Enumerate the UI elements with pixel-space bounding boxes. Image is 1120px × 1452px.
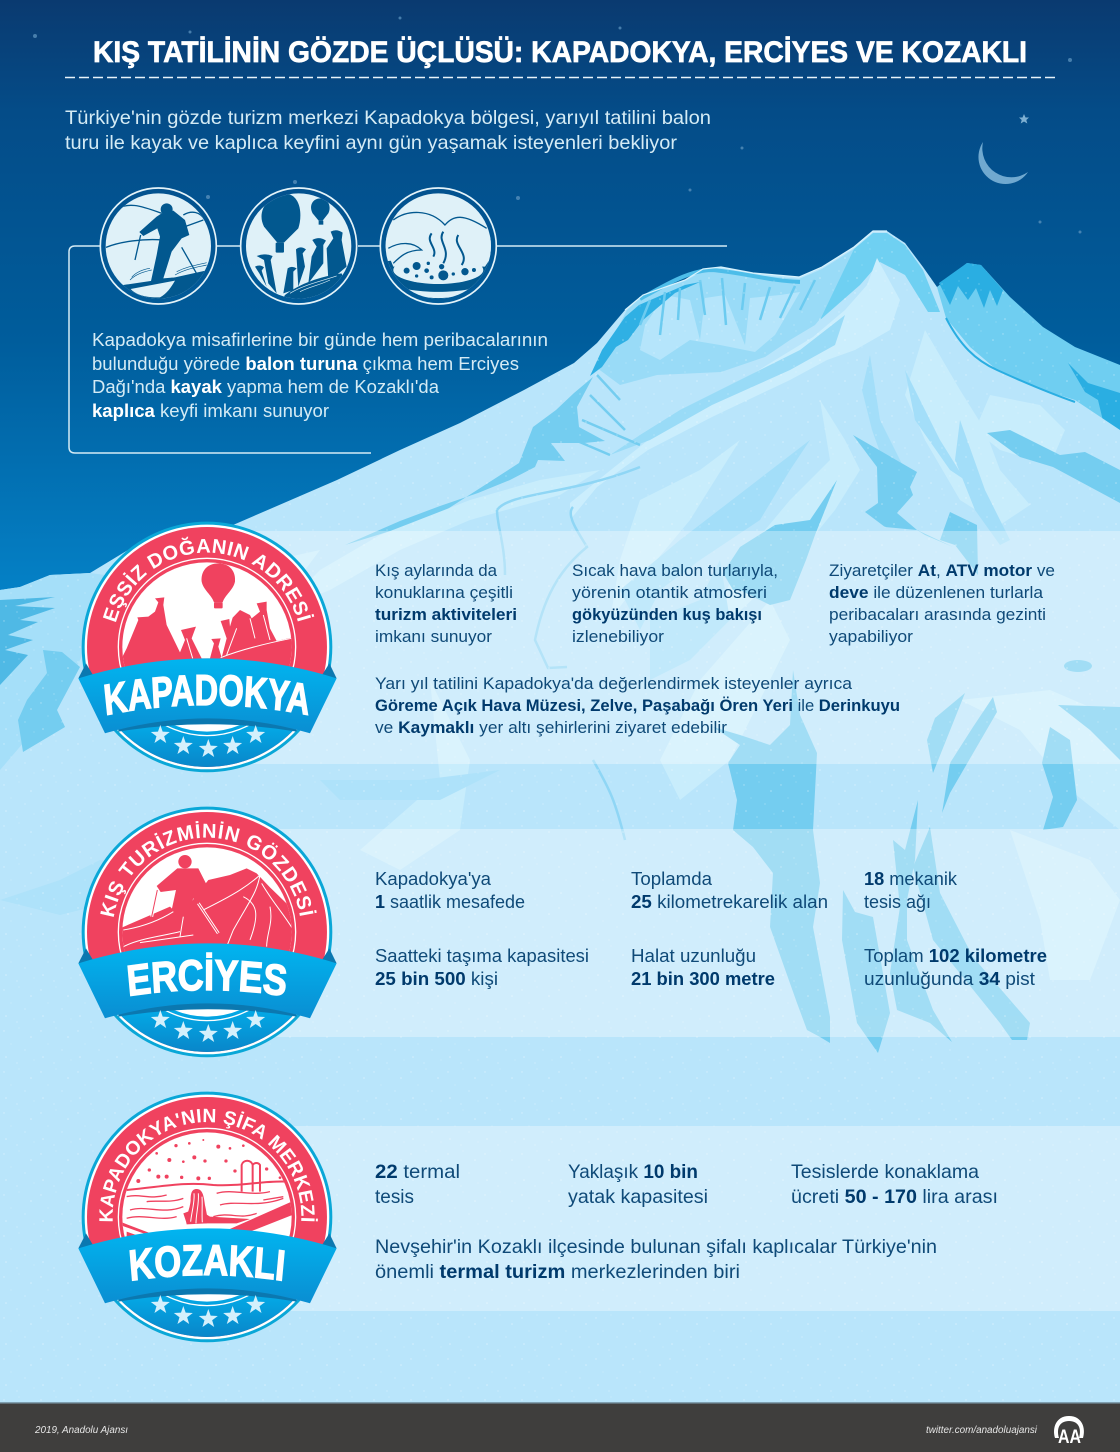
Kozaklı facts (375, 1161, 998, 1208)
Kozaklı paragraph (375, 1236, 937, 1283)
crater (597, 240, 870, 385)
Erciyes facts: Saatteki taşıma kapasitesi (375, 945, 589, 966)
callout text: Kapadokya misafirlerine bir günde hem peribacalarının (92, 329, 548, 350)
callout text: Dağı'nda kayak yapma hem de Kozaklı'da (92, 376, 440, 397)
Kozaklı facts: ücreti 50 - 170 lira arası (791, 1186, 998, 1208)
Kapadokya column 2: Sıcak hava balon turlarıyla, (572, 562, 778, 580)
Erciyes facts: Kapadokya'ya (375, 868, 492, 889)
title divider (65, 76, 1056, 78)
Erciyes facts: 25 kilometrekarelik alan (631, 891, 828, 912)
footer bar: 2019, Anadolu Ajansı (34, 1425, 128, 1436)
curved tagline: KAPADOKYA'NIN ŞİFA MERKEZİ (99, 1108, 318, 1222)
dark glacier patches (18, 430, 1120, 1053)
badge: Kapadokya (78, 522, 337, 772)
Erciyes facts (375, 868, 1047, 989)
thin rivers (497, 467, 640, 840)
translucent panels (200, 531, 1120, 1311)
Kapadokya column 1 (375, 562, 517, 646)
callout frame (69, 246, 727, 453)
footer bar: twitter.com/anadoluajansi (926, 1425, 1038, 1436)
Erciyes facts: 1 saatlik mesafede (375, 891, 525, 912)
ridges (100, 330, 1120, 980)
Kapadokya column 2: gökyüzünden kuş bakışı (572, 606, 762, 624)
Kapadokya paragraph: Göreme Açık Hava Müzesi, Zelve, Paşabağı Ören Yeri ile Derinkuyu (375, 696, 900, 715)
Erciyes facts: 25 bin 500 kişi (375, 968, 498, 989)
badge: Kozaklı (78, 1092, 337, 1342)
Kozaklı facts: 22 termal (375, 1161, 460, 1183)
Kapadokya column 1: Kış aylarında da (375, 562, 498, 580)
sky stars (33, 16, 1082, 234)
Kapadokya paragraph: ve Kaymaklı yer altı şehirlerini ziyaret edebilir (375, 719, 728, 737)
Kozaklı facts: Tesislerde konaklama (791, 1161, 979, 1183)
banner name: KAPADOKYA (104, 674, 308, 716)
Kapadokya column 1: imkanı sunuyor (375, 628, 493, 646)
night sky background (0, 0, 1120, 620)
banner name: KOZAKLI (129, 1244, 285, 1282)
callout text: kaplıca keyfi imkanı sunuyor (92, 400, 329, 421)
Kapadokya column 3: deve ile düzenlenen turlarla (829, 584, 1044, 602)
icon: thermal pool (380, 188, 496, 304)
curved tagline: KIŞ TURİZMİNİN GÖZDESİ (100, 821, 317, 917)
Kapadokya column 3: peribacaları arasında gezinti (829, 606, 1046, 624)
Kapadokya column 2: yörenin otantik atmosferi (572, 584, 767, 602)
Kapadokya column 3 (829, 562, 1055, 646)
scene: thermal pool (122, 1139, 292, 1236)
Anadolu Agency logo: AA (1058, 1427, 1081, 1448)
callout text: bulunduğu yörede balon turuna çıkma hem Erciyes (92, 353, 519, 374)
icon: skier (100, 188, 216, 304)
Erciyes facts: Toplamda (631, 868, 713, 889)
Kozaklı facts: yatak kapasitesi (568, 1186, 708, 1208)
Kapadokya paragraph: Yarı yıl tatilini Kapadokya'da değerlendirmek isteyenler ayrıca (375, 675, 853, 693)
Kozaklı facts: tesis (375, 1186, 414, 1208)
callout text (92, 329, 548, 421)
Kapadokya column 3: Ziyaretçiler At, ATV motor ve (829, 562, 1055, 580)
Erciyes facts: 18 mekanik (864, 868, 958, 889)
Kapadokya column 2: izlenebiliyor (572, 628, 665, 646)
Erciyes facts: Toplam 102 kilometre (864, 945, 1047, 966)
moon and star (978, 114, 1029, 184)
Kapadokya paragraph (375, 675, 900, 737)
Kozaklı paragraph: Nevşehir'in Kozaklı ilçesinde bulunan şifalı kaplıcalar Türkiye'nin (375, 1236, 937, 1258)
scene: balloon and chimneys (120, 563, 297, 672)
Kapadokya column 3: yapabiliyor (829, 628, 914, 646)
badge: Erciyes (78, 806, 337, 1058)
intro text: turu ile kayak ve kaplıca keyfini aynı gün yaşamak isteyenleri bekliyor (65, 132, 678, 154)
icon: balloons and fairy chimneys (241, 188, 357, 304)
intro text (65, 107, 711, 154)
Kapadokya column 1: konuklarına çeşitli (375, 584, 513, 602)
Anadolu Agency logo (1054, 1416, 1084, 1448)
footer bar (0, 1402, 1120, 1452)
Kozaklı facts: Yaklaşık 10 bin (568, 1161, 698, 1183)
Erciyes facts: tesis ağı (864, 891, 931, 912)
curved tagline: EŞSİZ DOĞANIN ADRESİ (102, 536, 314, 622)
left shadow (345, 377, 605, 545)
title: KIŞ TATİLİNİN GÖZDE ÜÇLÜSÜ: KAPADOKYA, ERCİYES VE KOZAKLI (93, 36, 1027, 69)
Erciyes facts: uzunluğunda 34 pist (864, 968, 1035, 989)
Kapadokya column 1: turizm aktiviteleri (375, 606, 517, 624)
Kapadokya column 2 (572, 562, 778, 646)
intro text: Türkiye'nin gözde turizm merkezi Kapadokya bölgesi, yarıyıl tatilini balon (65, 107, 711, 129)
Erciyes facts: Halat uzunluğu (631, 945, 756, 966)
banner name: ERCİYES (127, 952, 286, 996)
scene: skier and mountain (122, 855, 292, 952)
Erciyes facts: 21 bin 300 metre (631, 968, 775, 989)
Kozaklı paragraph: önemli termal turizm merkezlerinden biri (375, 1261, 740, 1283)
